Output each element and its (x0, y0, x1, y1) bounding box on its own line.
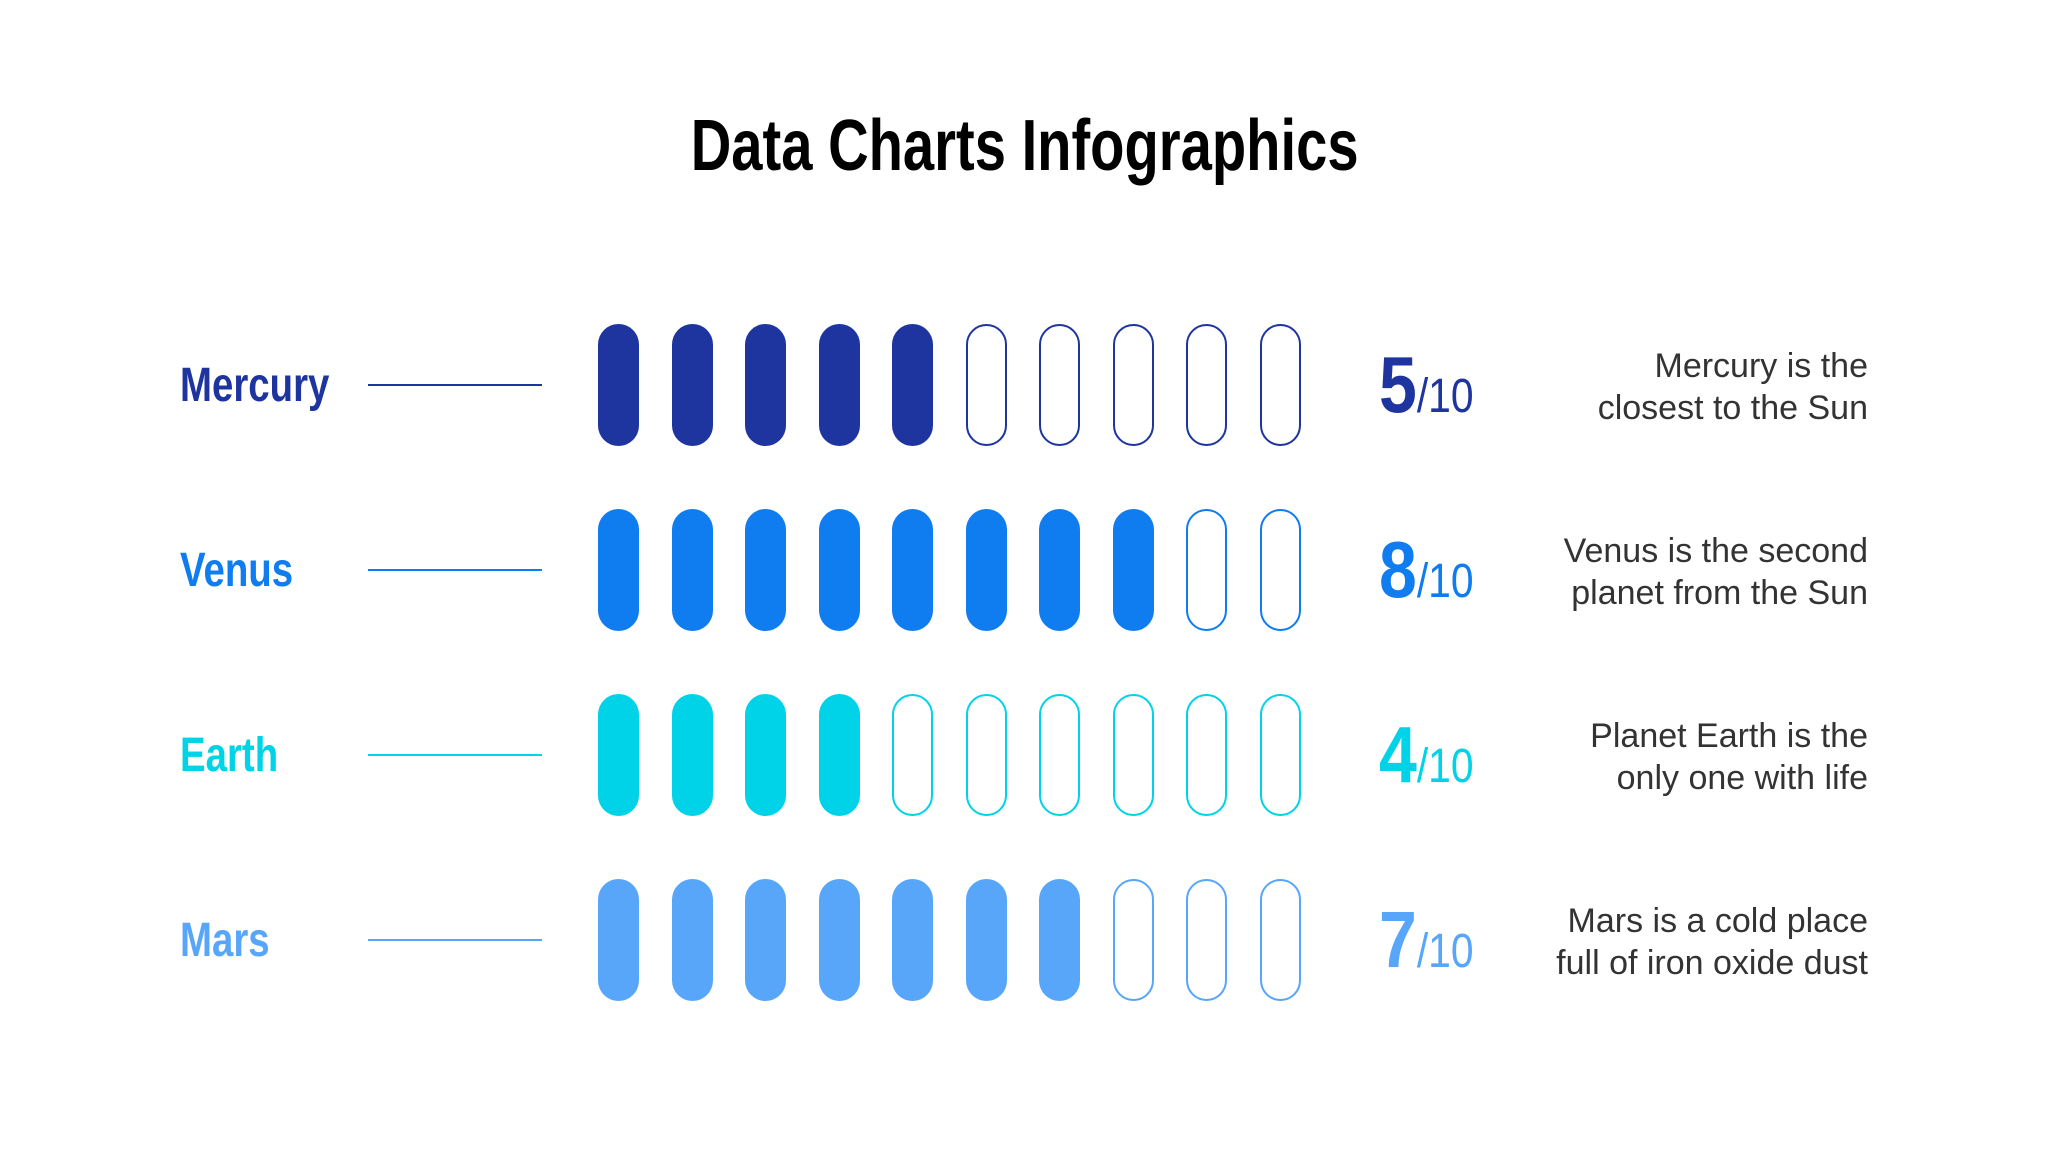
description: Mercury is the (1654, 347, 1868, 385)
description: Planet Earth is the (1590, 717, 1868, 755)
description (1590, 717, 1868, 797)
pills 5/10 (598, 324, 1301, 446)
connector line (368, 754, 542, 756)
description: Mars is a cold place (1568, 902, 1868, 940)
description (1556, 902, 1868, 982)
score: 4/10 (1379, 710, 1474, 799)
description (1564, 532, 1868, 612)
label: Earth: Earth (180, 729, 278, 782)
pills 7/10 (598, 879, 1301, 1001)
description: only one with life (1617, 759, 1868, 797)
score: 7/10 (1379, 895, 1474, 984)
connector line (368, 939, 542, 941)
description: closest to the Sun (1598, 389, 1868, 427)
score: 5/10 (1379, 340, 1474, 429)
description: planet from the Sun (1571, 574, 1868, 612)
connector line (368, 569, 542, 571)
description (1598, 347, 1868, 427)
label: Mars: Mars (180, 914, 270, 967)
description: Venus is the second (1564, 532, 1868, 570)
label: Mercury: Mercury (180, 359, 329, 412)
title: Data Charts Infographics (691, 106, 1359, 186)
connector line (368, 384, 542, 386)
label: Venus: Venus (180, 544, 293, 597)
row: Mercury (180, 324, 1868, 446)
row: Mars (180, 879, 1868, 1001)
score: 8/10 (1379, 525, 1474, 614)
pills 8/10 (598, 509, 1301, 631)
row: Venus (180, 509, 1868, 631)
description: full of iron oxide dust (1556, 944, 1868, 982)
row: Earth (180, 694, 1868, 816)
pills 4/10 (598, 694, 1301, 816)
